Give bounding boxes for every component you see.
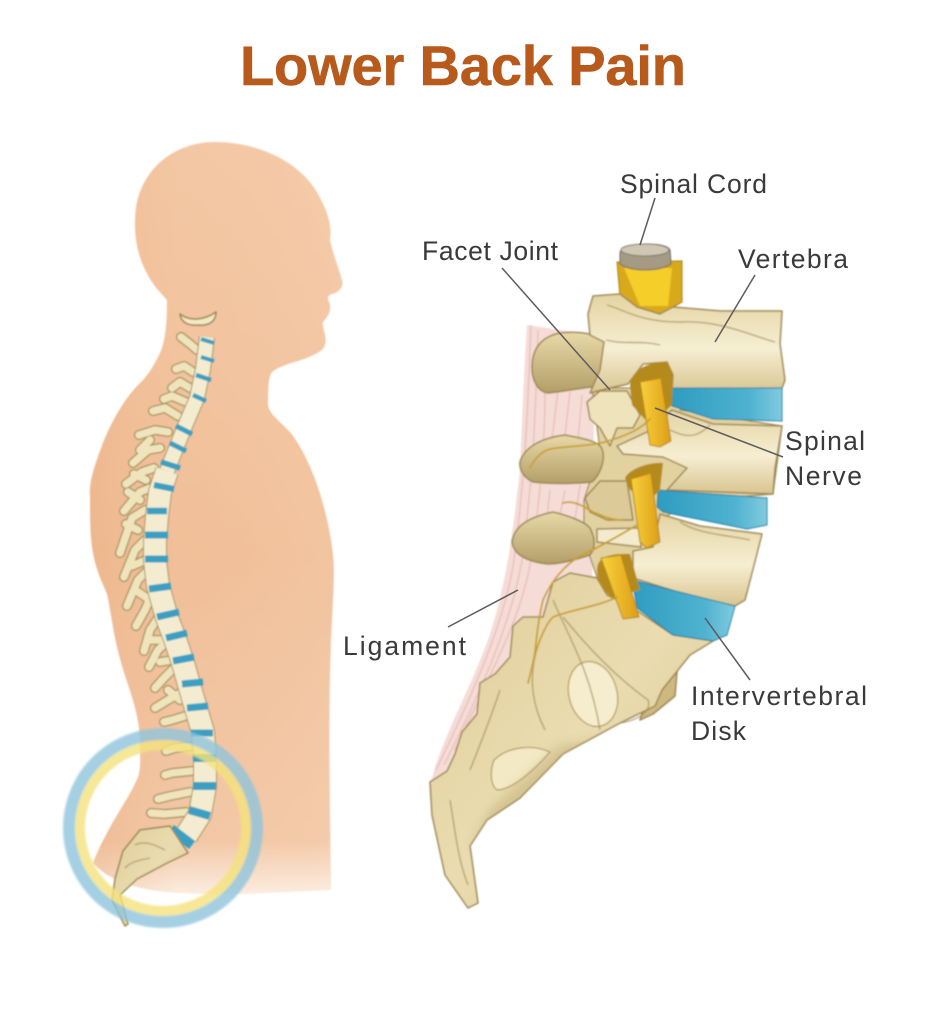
- label: Spinal Nerve: [655, 408, 865, 491]
- sacrum small: [112, 826, 188, 926]
- label: Intervertebral Disk: [691, 618, 867, 746]
- label: Spinal Nerve: Nerve: [785, 461, 862, 491]
- bone backing between vertebrae: [584, 388, 782, 585]
- panel: human body with spine: [69, 142, 343, 926]
- spinous processes: [120, 337, 197, 814]
- spinal nerves: [528, 362, 673, 683]
- label: Spinal Nerve: Spinal: [785, 426, 865, 456]
- panel: lumbar spine detail: [430, 244, 785, 908]
- intervertebral disks: [632, 388, 782, 641]
- L5 vertebra: [633, 514, 762, 606]
- atlas top: [180, 312, 216, 325]
- ligament: [430, 325, 595, 788]
- L3 vertebra: [588, 294, 785, 393]
- blue disks: [145, 339, 216, 845]
- transverse processes: [532, 332, 605, 393]
- sacrum: [430, 573, 713, 908]
- label: Facet Joint: [422, 236, 610, 390]
- label: Ligament: [343, 590, 518, 661]
- label: Intervertebral Disk: Intervertebral: [691, 681, 867, 711]
- vertebral bodies: [167, 337, 207, 471]
- spine column: [112, 312, 216, 926]
- pain ring: [69, 734, 257, 922]
- label: Facet Joint: Facet Joint: [422, 236, 559, 266]
- label: Intervertebral Disk: Disk: [691, 716, 747, 746]
- label: Ligament: Ligament: [343, 631, 467, 661]
- body silhouette: [90, 142, 343, 894]
- L4 vertebra: [617, 410, 782, 494]
- label: Spinal Cord: [620, 169, 767, 245]
- title: Lower Back Pain: [240, 34, 686, 97]
- spinal cord: [617, 244, 682, 314]
- label: Vertebra: [715, 244, 848, 342]
- facet joints: [587, 391, 640, 446]
- label: Vertebra: Vertebra: [738, 244, 848, 274]
- label: Spinal Cord: Spinal Cord: [620, 169, 767, 199]
